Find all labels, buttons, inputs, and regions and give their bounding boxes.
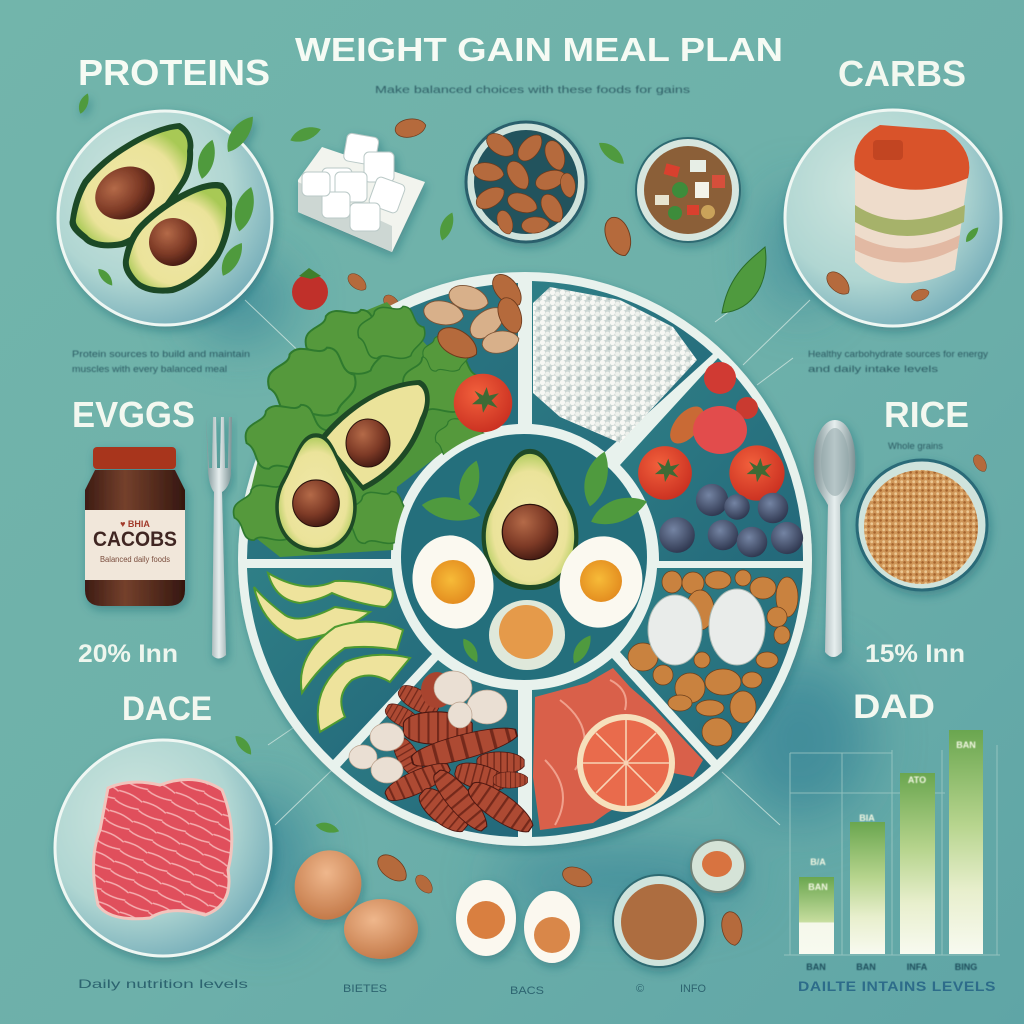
central plate (234, 269, 812, 846)
text: carbs note (808, 349, 989, 374)
panel: meat plate (55, 740, 271, 956)
panel: carbs layered cake plate (785, 110, 1001, 326)
avocado halves (70, 123, 232, 294)
icon: basil leaf (722, 247, 766, 313)
eggs: halved (456, 880, 580, 963)
segment: almonds and mushrooms (340, 660, 538, 839)
layered cake (854, 125, 969, 283)
heading: dad: DAD (853, 688, 935, 726)
bar value labels: ATO (908, 775, 926, 785)
axis labels (806, 962, 977, 972)
bar value labels (808, 740, 976, 892)
chart caption: DAILTE INTAINS LEVELS (798, 978, 996, 994)
heading: rice: RICE (884, 394, 969, 435)
bowl: sauce (613, 875, 705, 967)
panel: proteins avocado plate (58, 92, 272, 325)
egg right (549, 527, 653, 637)
title: WEIGHT GAIN MEAL PLAN (295, 31, 783, 68)
egg bottom (489, 600, 565, 670)
heading: carbs: CARBS (838, 53, 966, 94)
stat: 15 percent: 15% Inn (865, 640, 965, 668)
egg left (402, 526, 504, 638)
chart grid (784, 745, 1000, 955)
icon: shell (691, 840, 745, 892)
caption: bottom middle: INFO (680, 983, 706, 995)
jar label: CACOBS (93, 528, 177, 551)
text: proteins note (72, 349, 250, 374)
center leaves (420, 449, 650, 666)
heading: dace: DACE (122, 690, 212, 728)
icon: sugar cubes box (298, 133, 425, 252)
scattered nuts and leaves (232, 116, 989, 947)
axis labels: BAN (806, 962, 826, 972)
heading: proteins: PROTEINS (78, 52, 270, 93)
eggs: whole brown (283, 839, 418, 959)
segment: nuts and cheese (620, 568, 803, 760)
icon: strawberry (292, 268, 328, 310)
bowl: mixed salad (636, 138, 740, 242)
heading: eggs: EVGGS (72, 394, 195, 435)
small nuts (823, 225, 981, 303)
bar value labels: B/A (810, 857, 826, 867)
steak (93, 780, 232, 919)
caption: bottom middle: BACS (510, 985, 544, 997)
small label: rice: Whole grains (888, 441, 944, 451)
connector lines (245, 300, 810, 825)
nuts (422, 269, 528, 365)
background shading (190, 190, 870, 930)
text: proteins note: muscles with every balanced meal (72, 364, 227, 374)
axis labels: INFA (907, 962, 928, 972)
center avocado (482, 449, 578, 590)
bowl: almonds (466, 122, 586, 242)
avocado front (275, 433, 357, 552)
stat: 20 percent: 20% Inn (78, 640, 178, 668)
icon: spoon (814, 420, 855, 657)
axis labels: BAN (856, 962, 876, 972)
text: proteins note: Protein sources to build and maintain (72, 349, 250, 359)
greens garnish (76, 92, 259, 288)
segment: meat and grapefruit (532, 658, 711, 837)
jar label: Balanced daily foods (100, 555, 170, 564)
icon: fork (206, 417, 232, 658)
segment: tomatoes and berries (620, 358, 803, 561)
segment: white rice (532, 281, 713, 452)
text: carbs note: Healthy carbohydrate sources for energy (808, 349, 989, 359)
segment: greens, tomato and nuts (234, 269, 528, 559)
bar value labels: BIA (859, 813, 875, 823)
caption: bottom middle: BIETES (343, 983, 387, 995)
icon: jam jar (85, 447, 185, 606)
caption: bottom middle: © (636, 983, 644, 995)
bowl: rice grains (857, 460, 987, 590)
bar value labels: BAN (956, 740, 976, 750)
segment: avocado slices (247, 568, 432, 760)
tomato (454, 374, 512, 432)
bar value labels: BAN (808, 882, 828, 892)
center bowl (394, 427, 654, 687)
jar label (93, 519, 177, 564)
text: carbs note: and daily intake levels (808, 364, 939, 374)
grapefruit (577, 714, 675, 812)
caption: daily intake: Daily nutrition levels (78, 977, 248, 991)
bar chart (784, 730, 1000, 972)
lettuce (234, 302, 487, 557)
cheese chunks (648, 589, 765, 665)
jar label: ♥ BHIA (120, 519, 150, 529)
caption: bottom middle (343, 983, 706, 997)
bars (799, 730, 983, 954)
subtitle: Make balanced choices with these foods for gains (375, 85, 690, 96)
axis labels: BING (955, 962, 977, 972)
mushrooms (349, 671, 507, 783)
avocado back (318, 380, 430, 491)
